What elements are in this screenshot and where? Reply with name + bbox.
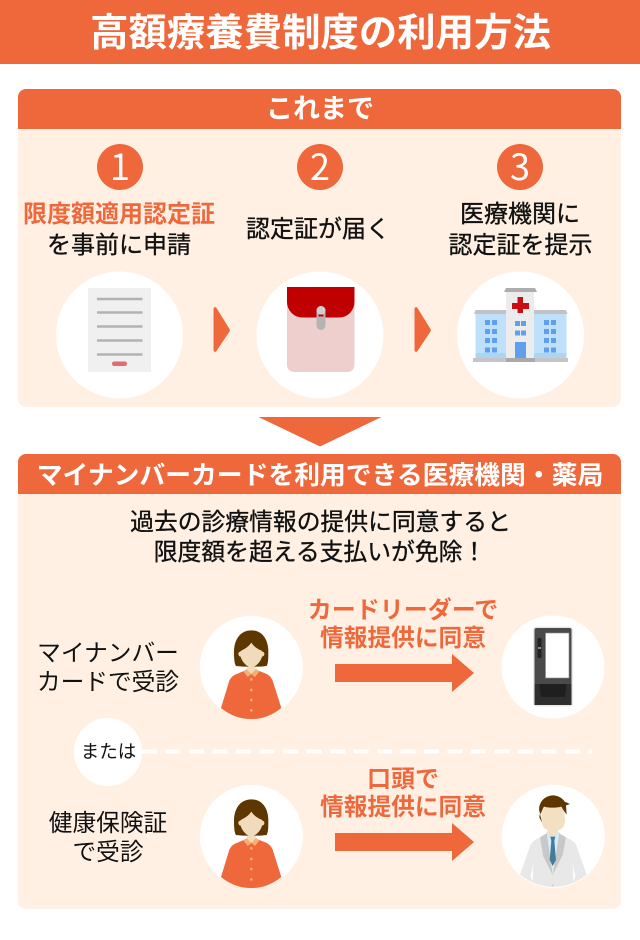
title banner: 高額療養費制度の利用方法 xyxy=(90,12,551,55)
icon: woman, verbal xyxy=(200,785,303,888)
step 2 text: 認定証が届く xyxy=(246,216,390,243)
icon: envelope xyxy=(256,272,384,398)
step 1 number xyxy=(97,139,143,191)
step 3 number: 3 xyxy=(510,139,530,191)
step 1 text: 限度額適用認定証 xyxy=(23,201,215,228)
arrow: card reader consent xyxy=(335,654,474,692)
intro text xyxy=(130,509,511,566)
または badge: または xyxy=(81,741,136,762)
arrow: step 2 to 3 xyxy=(414,307,431,352)
orange text: card reader: 情報提供に同意 xyxy=(320,625,486,652)
arrow: down xyxy=(258,417,382,446)
step 2 number xyxy=(297,139,343,191)
step 2 number: 2 xyxy=(310,139,330,191)
label: マイナンバーカードで受診: カードで受診 xyxy=(37,669,179,696)
icon: doctor xyxy=(502,785,605,888)
step 1 text xyxy=(23,201,215,259)
orange text: verbal xyxy=(320,766,486,821)
icon: card reader xyxy=(502,616,604,718)
icon: hospital xyxy=(457,272,584,398)
label: 健康保険証で受診 xyxy=(49,810,167,866)
label: マイナンバーカードで受診 xyxy=(37,641,179,696)
orange text: verbal: 口頭で xyxy=(367,766,439,793)
step 1 text: を事前に申請 xyxy=(47,232,191,259)
intro text: 限度額を超える支払いが免除！ xyxy=(154,539,486,566)
または badge xyxy=(74,718,592,786)
panel: これまで xyxy=(18,89,621,407)
panel heading: これまで: これまで xyxy=(266,94,374,124)
intro text: 過去の診療情報の提供に同意すると xyxy=(130,509,511,536)
panel heading: マイナンバーカード: マイナンバーカードを利用できる医療機関・薬局 xyxy=(37,461,603,490)
panel heading: これまで xyxy=(18,89,621,129)
step 1 number: 1 xyxy=(110,139,130,191)
orange text: card reader: カードリーダーで xyxy=(308,596,498,624)
orange text: verbal: 情報提供に同意 xyxy=(320,794,486,821)
icon: application document xyxy=(56,272,183,398)
panel: マイナンバーカード xyxy=(18,454,621,909)
label: 健康保険証で受診: で受診 xyxy=(72,839,144,866)
step 3 text xyxy=(448,201,592,259)
step 3 text: 認定証を提示 xyxy=(448,232,592,259)
panel heading: マイナンバーカード xyxy=(18,454,621,494)
arrow: verbal consent xyxy=(335,823,474,861)
label: 健康保険証で受診: 健康保険証 xyxy=(49,810,167,837)
arrow: step 1 to 2 xyxy=(214,307,230,352)
label: マイナンバーカードで受診: マイナンバー xyxy=(37,641,179,667)
step 3 number xyxy=(497,139,543,191)
orange text: card reader xyxy=(308,596,498,652)
icon: woman, card xyxy=(200,616,303,719)
title banner xyxy=(0,0,640,64)
step 3 text: 医療機関に xyxy=(460,201,580,228)
